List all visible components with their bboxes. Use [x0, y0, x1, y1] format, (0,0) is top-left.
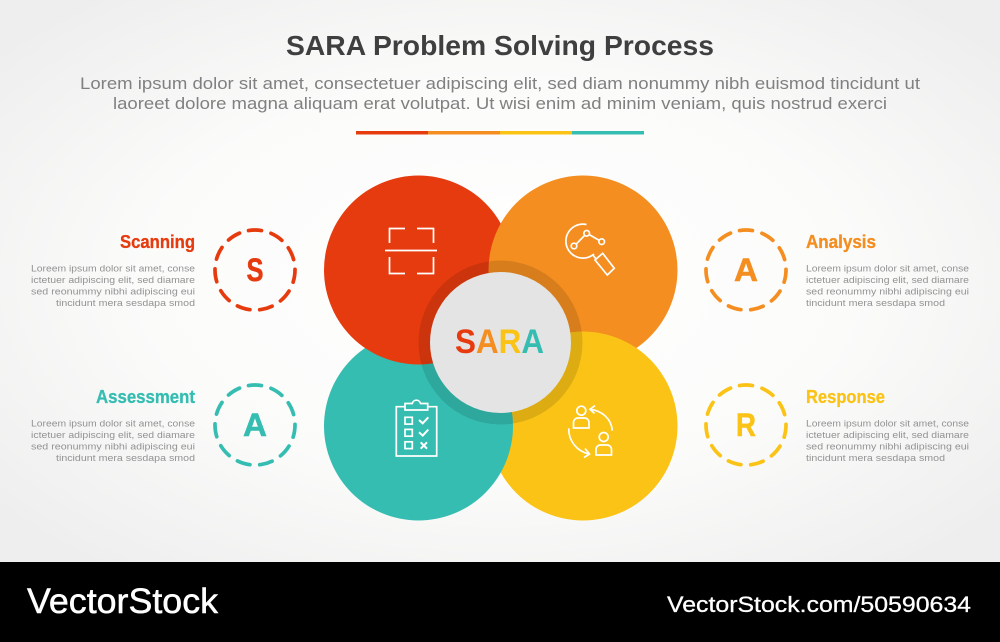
circle: analysis: [488, 176, 678, 364]
text block: scanning: ictetuer adipiscing elit, sed diamare: [31, 275, 195, 286]
badge: A teal: A: [243, 407, 267, 443]
heading: assessment: Assessment: [96, 387, 195, 407]
circle: assessment: [324, 332, 513, 520]
panel: response: [700, 379, 969, 471]
subtitle text block: Lorem ipsum dolor sit amet, consectetuer adipiscing elit, sed diam nonummy nibh euismod tincidunt ut: [80, 74, 920, 93]
footer image id: VectorStock.com/50590634: [667, 592, 971, 617]
badge: A orange: [700, 224, 792, 316]
subtitle text block: laoreet dolore magna aliquam erat volutpat. Ut wisi enim ad minim veniam, quis nostrud exerci: [113, 94, 887, 113]
panel: scanning: [31, 224, 301, 316]
text block: scanning: [31, 264, 195, 309]
text block: assessment: ictetuer adipiscing elit, sed diamare: [31, 430, 195, 441]
subtitle text block: [80, 74, 920, 113]
text block: response: Loreem ipsum dolor sit amet, conse: [806, 418, 969, 430]
text block: analysis: sed reonummy nibhi adipiscing eui: [806, 286, 969, 298]
text block: scanning: tincidunt mera sesdapa smod: [56, 298, 195, 309]
badge: S: S: [246, 252, 264, 288]
footer bar: [0, 562, 1000, 642]
heading: analysis: Analysis: [806, 232, 876, 252]
text block: assessment: Loreem ipsum dolor sit amet, conse: [31, 418, 195, 430]
text block: analysis: Loreem ipsum dolor sit amet, conse: [806, 264, 969, 274]
icon: magnifier with nodes: [566, 224, 614, 275]
badge: R: [700, 379, 792, 471]
four colour divider bar: [356, 131, 644, 134]
text block: analysis: [806, 264, 969, 309]
text block: response: tincidunt mera sesdapa smod: [806, 453, 945, 464]
text block: assessment: sed reonummy nibhi adipiscing eui: [31, 442, 195, 452]
text block: response: sed reonummy nibhi adipiscing eui: [806, 442, 969, 452]
icon: scan frame: [385, 228, 437, 274]
panel: analysis: [700, 224, 969, 316]
title: SARA Problem Solving Process: [286, 30, 714, 61]
centre disc: [430, 272, 571, 413]
icon: checklist clipboard: [396, 400, 437, 456]
overlapping circles diagram: [324, 176, 678, 520]
text block: response: ictetuer adipiscing elit, sed diamare: [806, 430, 969, 441]
text block: assessment: [31, 418, 195, 464]
heading: scanning: Scanning: [120, 232, 195, 252]
circle: scanning: [324, 176, 513, 364]
text block: analysis: tincidunt mera sesdapa smod: [806, 298, 945, 309]
circle: response: [488, 332, 678, 520]
text block: scanning: sed reonummy nibhi adipiscing eui: [31, 286, 195, 298]
heading: response: Response: [806, 387, 885, 407]
text block: response: [806, 418, 969, 464]
icon: people exchange arrows: [569, 406, 612, 458]
footer logo text: VectorStock: [27, 582, 219, 621]
centre label SARA: SARA: [455, 323, 544, 361]
text block: analysis: ictetuer adipiscing elit, sed diamare: [806, 275, 969, 286]
circle: scanning overlap on assessment: [332, 310, 434, 364]
badge: A orange: A: [734, 252, 758, 288]
badge: S: [209, 224, 301, 316]
centre ring: [418, 260, 582, 424]
badge: R: R: [736, 407, 756, 443]
text block: assessment: tincidunt mera sesdapa smod: [56, 453, 195, 464]
text block: scanning: Loreem ipsum dolor sit amet, conse: [31, 264, 195, 274]
panel: assessment: [31, 379, 301, 471]
badge: A teal: [209, 379, 301, 471]
